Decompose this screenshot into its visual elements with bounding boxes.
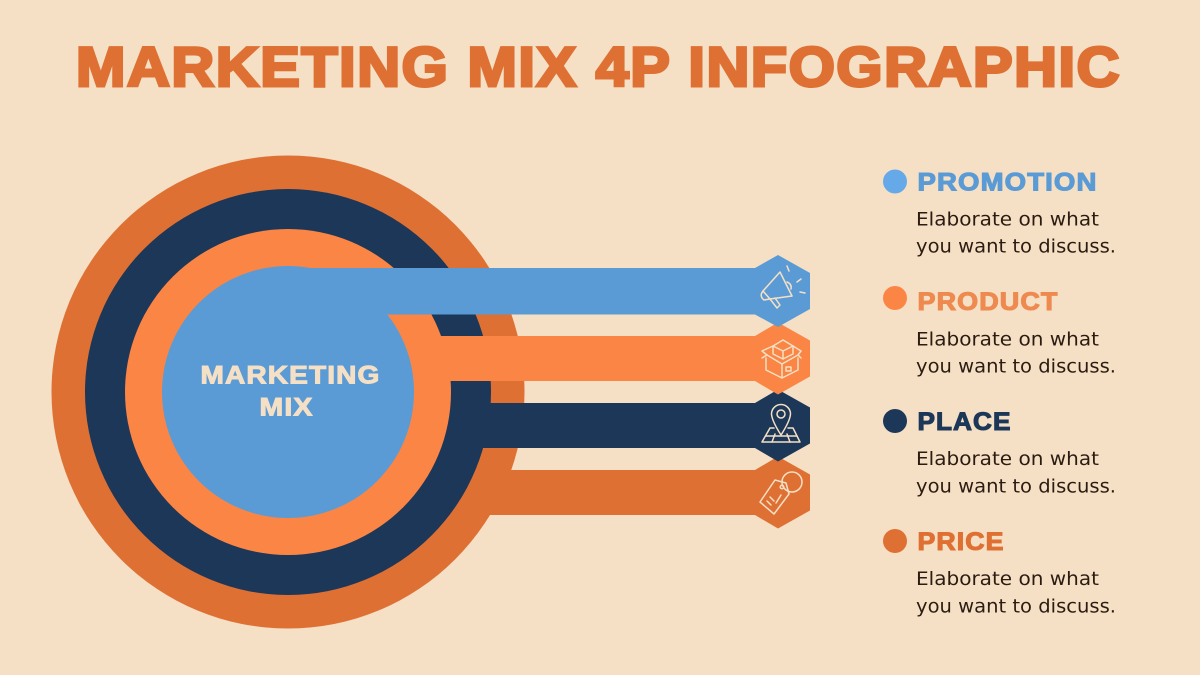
legend: price xyxy=(883,528,1116,618)
legend: price: you want to discuss. xyxy=(916,596,1116,618)
legend: price: Elaborate on what xyxy=(916,568,1099,590)
place arm xyxy=(400,390,810,462)
legend: place: Elaborate on what xyxy=(916,448,1099,470)
legend: promotion xyxy=(883,168,1116,258)
legend: product: you want to discuss. xyxy=(916,356,1116,378)
center label: MARKETING xyxy=(200,362,380,390)
legend: promotion: you want to discuss. xyxy=(916,236,1116,258)
price arm xyxy=(400,456,810,528)
legend: product: PRODUCT xyxy=(918,288,1058,316)
promotion arm xyxy=(300,255,810,327)
legend: place xyxy=(883,408,1116,498)
legend: place: you want to discuss. xyxy=(916,476,1116,498)
legend: promotion: Elaborate on what xyxy=(916,208,1099,230)
legend: place: PLACE xyxy=(918,408,1012,436)
outer ring xyxy=(52,156,524,628)
product arm xyxy=(400,322,810,394)
orange ring xyxy=(125,229,451,555)
center label xyxy=(200,362,380,422)
icon: megaphone xyxy=(761,266,805,308)
legend: promotion: PROMOTION xyxy=(918,168,1098,196)
navy ring xyxy=(85,189,491,595)
title: MARKETING MIX 4P INFOGRAPHIC xyxy=(76,35,1121,98)
legend: product xyxy=(883,286,1116,378)
icon: map pin xyxy=(762,404,800,442)
icon: price tag xyxy=(760,472,802,514)
icon: box xyxy=(762,340,801,378)
legend: price: PRICE xyxy=(918,528,1004,556)
center circle xyxy=(162,266,414,518)
center label: MIX xyxy=(260,394,314,422)
legend: product: Elaborate on what xyxy=(916,328,1099,350)
